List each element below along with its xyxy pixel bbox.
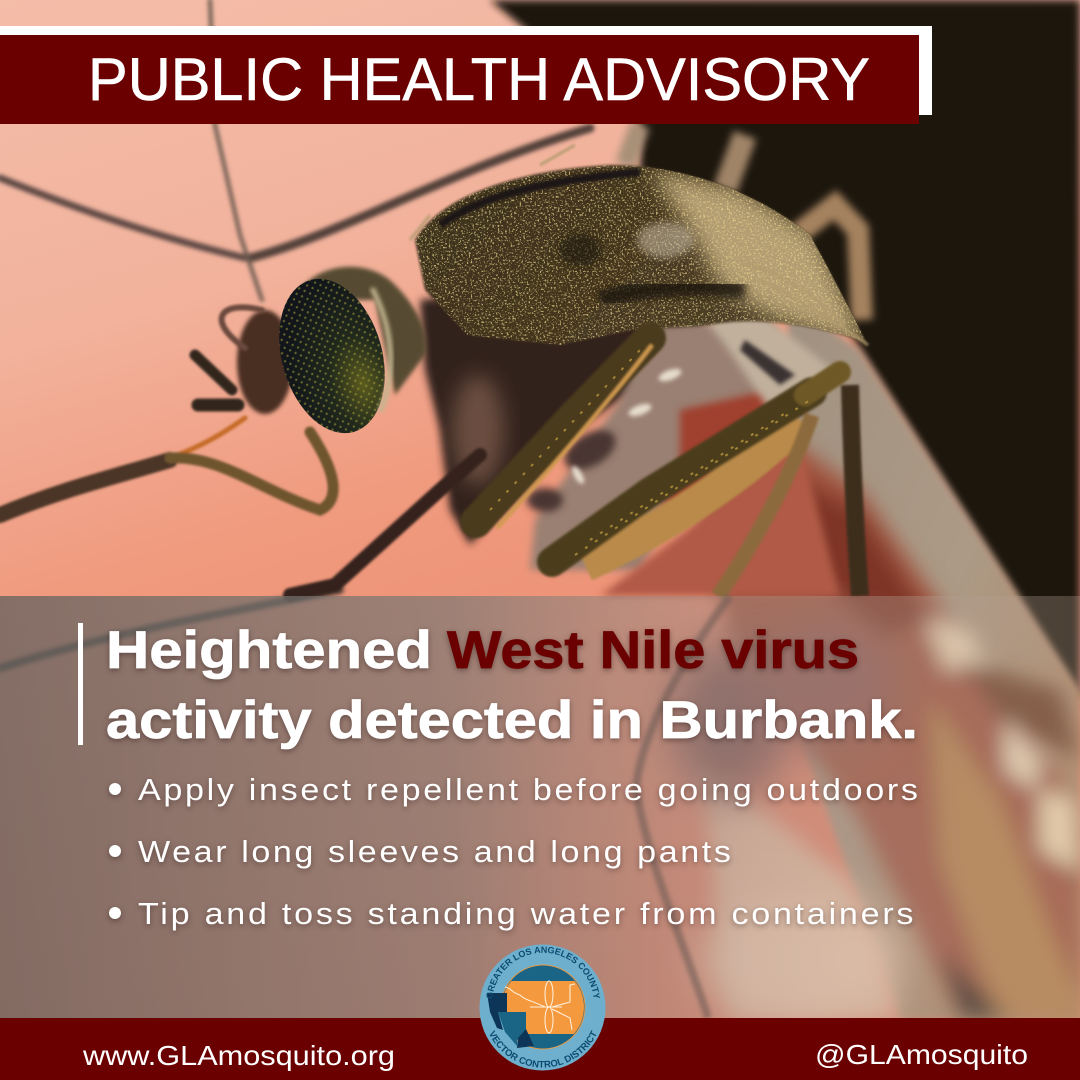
heading: West Nile virus [447,621,859,680]
thorax [413,163,866,346]
orange field [504,981,584,1034]
state and county map [487,993,507,1030]
white scales on sac [570,366,683,486]
gold dusting on legs [490,350,810,555]
wing [760,300,1080,1020]
title text: PUBLIC HEALTH ADVISORY [88,46,870,113]
sac dark spots [527,422,622,512]
red blood belly [650,390,780,530]
title banner [0,26,932,124]
white frame [0,26,932,115]
proboscis and palps [0,307,333,515]
lower chest [452,375,504,485]
red bar [0,35,919,124]
thorax bristles [410,145,868,345]
abdomen [680,430,1080,1018]
logo: vector control district seal [480,944,606,1070]
bullet list [109,772,918,931]
logo: vector control district seal: VECTOR CONTROL DISTRICT [490,1030,596,1068]
blurred scale highlights [670,620,900,1020]
mosquito emblem [505,981,575,1033]
belly below leg [600,440,840,596]
front and middle legs [290,338,860,596]
middle femur orange band [585,420,800,565]
website: www.GLAmosquito.org [82,1040,395,1071]
blurred legs at the back [625,125,862,320]
heading: activity detected in Burbank. [106,691,918,750]
ring text: GREATER LOS ANGELES COUNTY [486,946,600,998]
head [237,266,426,446]
light hair on rear thorax [650,170,866,345]
heading: Heightened [106,621,432,680]
antennae [0,0,590,668]
dark plate stripe [740,340,795,385]
background: dark backdrop [490,0,1080,700]
cream side plate [690,300,835,410]
bullet 2: Wear long sleeves and long pants [138,834,731,869]
translucent abdomen sac [530,320,810,570]
chest [420,290,720,545]
heading accent line [78,623,83,745]
social handle: @GLAmosquito [815,1039,1028,1070]
heading [106,621,918,750]
middle femur dark band [552,392,812,562]
translucent text panel [0,596,1080,1020]
front femur [476,338,650,522]
bullet 3: Tip and toss standing water from containers [138,896,914,931]
bullet 1: Apply insect repellent before going outdoors [138,772,918,807]
footer bar [0,1018,1080,1080]
leg shadow under panel [636,596,730,1018]
